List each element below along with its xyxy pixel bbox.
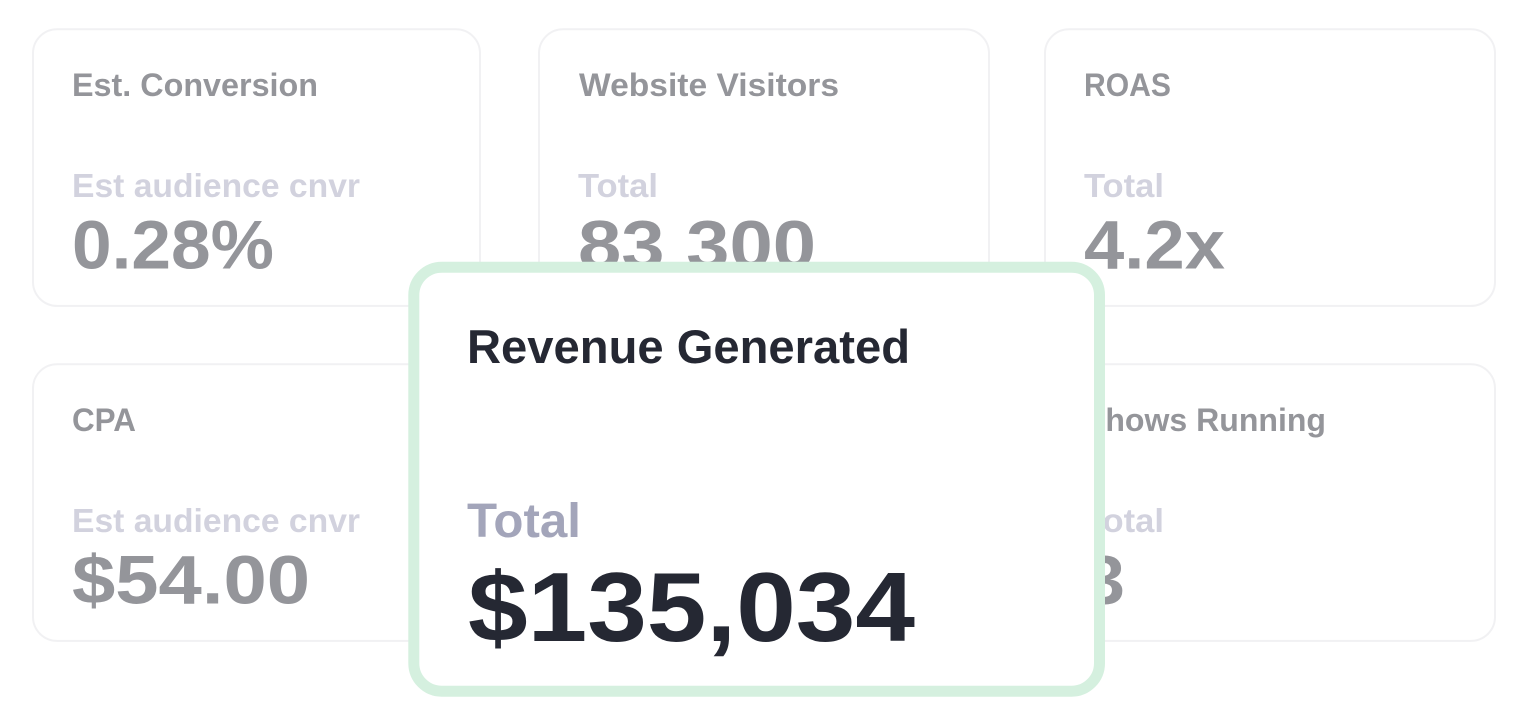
panel: est. conversion: Est audience cnvr <box>72 167 360 204</box>
panel: website visitors: Website Visitors <box>579 67 839 103</box>
panel: est. conversion: 0.28% <box>72 206 274 284</box>
panel: cpa: Est audience cnvr <box>72 502 360 539</box>
panel: roas: ROAS <box>1084 67 1171 103</box>
panel: website visitors: 83 300 <box>578 206 816 284</box>
panel: est. conversion: Est. Conversion <box>72 67 318 103</box>
panel: shows running: 3 <box>1084 542 1125 618</box>
panel: revenue generated: $135,034 <box>468 552 915 662</box>
panel: cpa: $54.00 <box>72 542 310 618</box>
panel: shows running: Total <box>1084 502 1164 539</box>
panel: cpa: CPA <box>72 402 136 438</box>
panel: shows running <box>1045 364 1495 641</box>
panel: revenue generated: Total <box>467 494 581 548</box>
panel: est. conversion <box>33 29 480 306</box>
panel: shows running: Shows Running <box>1084 402 1326 438</box>
panel: revenue generated: Revenue Generated <box>467 320 910 373</box>
panel: roas <box>1045 29 1495 306</box>
panel: roas: Total <box>1084 167 1164 204</box>
panel: website visitors: Total <box>578 167 658 204</box>
panel: cpa <box>33 364 480 641</box>
panel: roas: 4.2x <box>1084 206 1225 284</box>
panel: website visitors <box>539 29 989 306</box>
panel: revenue generated <box>414 267 1100 691</box>
